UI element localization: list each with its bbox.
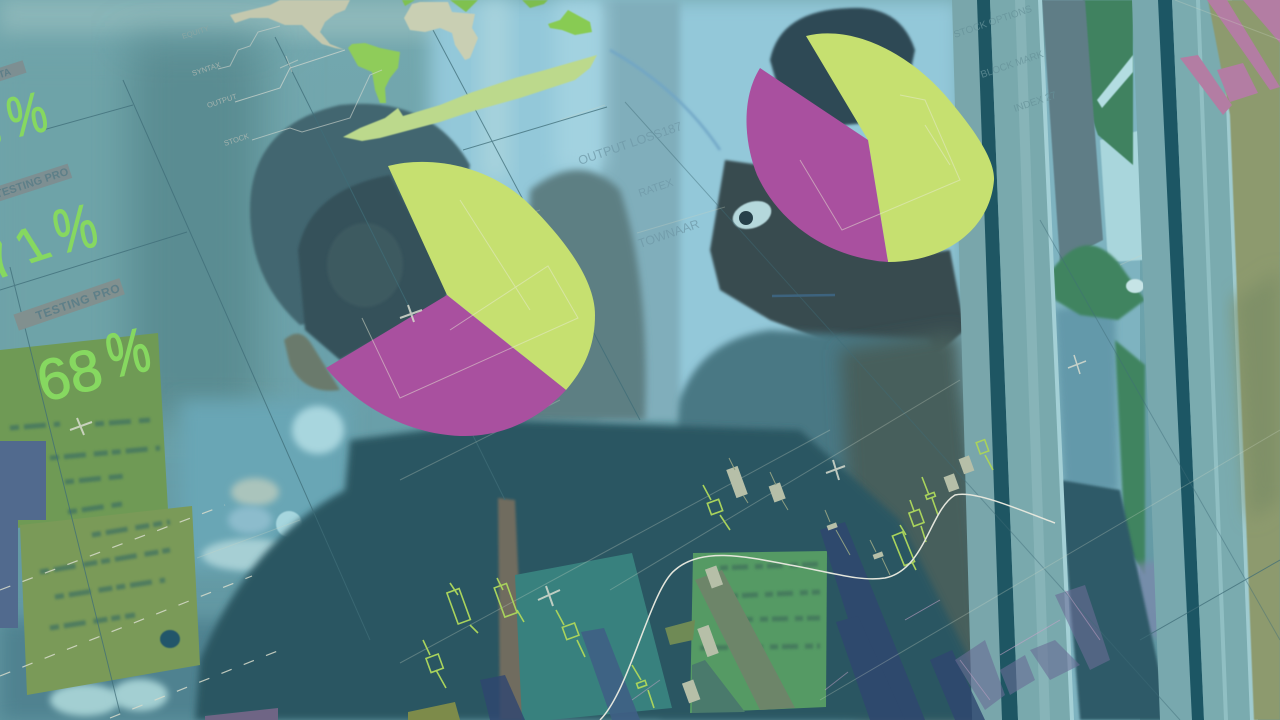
percent 71: % [47, 190, 103, 267]
map callout lines and labels: STOCK [223, 131, 250, 148]
percent labels panel [0, 60, 156, 415]
market labels centre [576, 119, 701, 251]
world map [230, 0, 597, 141]
map callout lines and labels: SYNTAX [191, 60, 222, 78]
sticky notes centre [498, 498, 827, 720]
label tag top [0, 60, 27, 87]
label tag bottom [13, 278, 125, 331]
percent 71 [0, 190, 103, 290]
map: south america [348, 43, 400, 103]
candlestick chart [423, 440, 993, 708]
label tag bottom: TESTING PRO [34, 281, 122, 323]
dashed trend lines [0, 505, 285, 718]
map: north america [230, 0, 350, 50]
map: africa [404, 2, 478, 60]
bar chart overlay [205, 522, 1110, 720]
pie chart large [326, 162, 595, 436]
percent 68 [30, 314, 156, 415]
percent 68: % [100, 314, 156, 391]
pie chart small [746, 33, 994, 262]
crosshair markers [70, 56, 1086, 606]
map: eurasia [402, 0, 478, 12]
market labels right [952, 4, 1058, 115]
person two: head, hand and marker [710, 8, 965, 360]
sticky notes left [0, 333, 200, 695]
percent 71: 1 [3, 216, 60, 273]
window frames [952, 0, 1280, 720]
map: antarctica strip [343, 55, 597, 141]
pink sticky strips on far window [1180, 0, 1280, 115]
market labels right: INDEX 27 [1012, 90, 1058, 115]
dark bodies of the people [195, 330, 1000, 720]
map callout lines and labels: OUTPUT [206, 92, 238, 110]
background woman silhouette [520, 170, 646, 420]
map callout lines and labels: EQUITY [181, 24, 210, 41]
market labels centre: RATEX [637, 177, 676, 200]
percent 68: 68 [30, 336, 109, 415]
white curve line [600, 494, 1055, 720]
market labels centre: OUTPUT LOSS187 [576, 119, 684, 168]
map: australia [548, 10, 592, 35]
map callout lines and labels [181, 24, 382, 148]
person one: hat and head [250, 104, 470, 391]
percent top: % [1, 79, 53, 150]
market labels right: STOCK OPTIONS [952, 4, 1034, 41]
market labels right: BLOCK MARK [979, 49, 1045, 81]
market labels centre: TOWNAAR [636, 217, 701, 251]
